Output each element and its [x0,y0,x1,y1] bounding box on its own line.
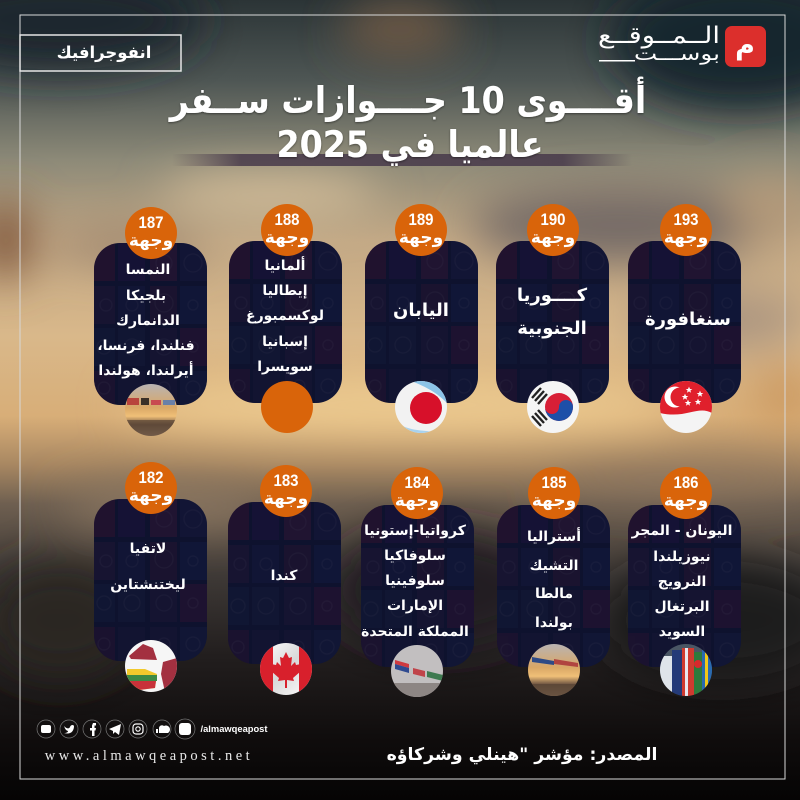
country text: اليابان [393,300,449,321]
logo [598,23,766,67]
country list: النمسا [126,262,170,278]
badge: 187: 187 [138,213,164,232]
title text: أقــــوى 10 جــــوازات ســفر [168,76,646,122]
handle text: /almawqeapost [200,724,268,735]
badge: 190 [527,204,579,256]
icon: South Korea flag [527,381,579,433]
country list: اليونان - المجر [631,523,732,539]
logo wordmark [598,23,720,65]
badge: 190: وجهة [531,228,575,248]
badge: 189 [395,204,447,256]
badge: 189: 189 [408,210,434,229]
badge: 188: 188 [274,210,300,229]
country list: السويد [659,624,705,640]
icon: Japan flag [395,381,447,433]
panel: 183 Canada [228,465,341,695]
badge: 190: 190 [540,210,566,229]
logo icon [725,26,766,67]
country list: كرواتيا-إستونيا [364,523,467,539]
badge: 183: 183 [274,471,298,490]
badge: 183 [260,465,312,517]
badge: 188: وجهة [265,228,309,248]
logo icon: م [735,30,755,61]
source text: المصدر: مؤشر "هينلي وشركاؤه [387,745,657,765]
panel: 185 Australia group [497,467,610,696]
country list: إيطاليا [262,283,308,299]
country list [97,262,195,379]
panel: 190 South Korea [496,204,609,433]
panel: 187 Austria group [94,207,207,436]
badge: 185 [528,467,580,519]
country list: بلجيكا [126,288,166,304]
panel: 184 Croatia group [361,467,474,697]
infographic label box: انفوجرافيك [57,43,151,63]
icon: Latvia and Lithuania maps [125,640,177,692]
country list: سلوفاكيا [384,548,446,564]
badge: 182 [125,462,177,514]
badge: 193: وجهة [664,228,708,248]
country list: لاتفيا [130,541,166,557]
country list: مالطا [535,586,573,602]
badge: 186: 186 [674,473,698,492]
title [168,76,646,166]
country list: سلوفينيا [385,573,445,589]
logo wordmark: الــمــوقــع [598,23,720,49]
social media row [37,719,268,739]
empty orange circle [261,381,313,433]
badge: 184: وجهة [395,491,439,511]
badge: 187: وجهة [129,231,173,251]
icon: social media glyphs [41,723,191,736]
country list: التشيك [530,558,578,574]
badge: 183: وجهة [264,489,308,509]
title text [168,76,646,166]
country text [517,285,588,339]
country list [527,527,581,631]
country list: النرويج [658,574,706,590]
badge: 185: وجهة [532,491,576,511]
country text: سنغافورة [645,309,731,330]
infographic label box [20,35,181,71]
panel: 186 Greece group [628,467,741,696]
panel: 188 Germany group [229,204,342,433]
badge: 185: 185 [542,473,566,492]
country list: أستراليا [527,527,581,545]
country text: كــــوريا [517,285,588,306]
country list: ليختنشتاين [110,577,186,593]
country list: فنلندا، فرنسا، [97,338,195,354]
country list [246,256,324,375]
country list: أيرلندا، هولندا [98,361,194,379]
badge: 184: 184 [404,473,430,492]
country list: الإمارات [387,598,443,614]
country list: نيوزيلندا [653,549,711,565]
badge: 184 [391,467,443,519]
country text: كندا [271,568,298,584]
panel: 182 Latvia group [94,462,207,692]
country list [361,523,469,640]
title underline band [172,154,632,166]
icon: Canada flag [260,643,312,695]
country list: الدانمارك [116,313,180,329]
country list [110,541,186,593]
badge: 193 [660,204,712,256]
badge: 182: وجهة [129,486,173,506]
country list [631,523,732,640]
icon: flags in the sky [391,645,443,697]
website url: www.almawqeapost.net [45,748,253,764]
icon: group of flags [660,644,712,696]
country list: بولندا [535,615,573,631]
country list: البرتغال [654,599,710,615]
badge: 193: 193 [674,210,698,229]
panel: 193 Singapore [628,204,741,433]
country text: الجنوبية [517,318,587,339]
badge: 187 [125,207,177,259]
icon: flags at sunset [125,384,177,436]
icon: flags over a skyline [528,644,580,696]
panel: 189 Japan [365,204,478,433]
badge: 186: وجهة [664,491,708,511]
badge: 186 [660,467,712,519]
country list: المملكة المتحدة [361,624,469,640]
badge: 182: 182 [138,468,164,487]
country list: لوكسمبورغ [246,308,324,324]
country list: إسبانيا [262,334,308,350]
logo wordmark: بوســـت [634,43,720,65]
country list: ألمانيا [265,256,305,274]
badge: 188 [261,204,313,256]
icon: Singapore flag [660,381,712,433]
badge: 189: وجهة [399,228,443,248]
icon: social media circles [37,719,195,739]
title text: عالميا في 2025 [276,123,544,166]
country list: سويسرا [257,359,313,375]
